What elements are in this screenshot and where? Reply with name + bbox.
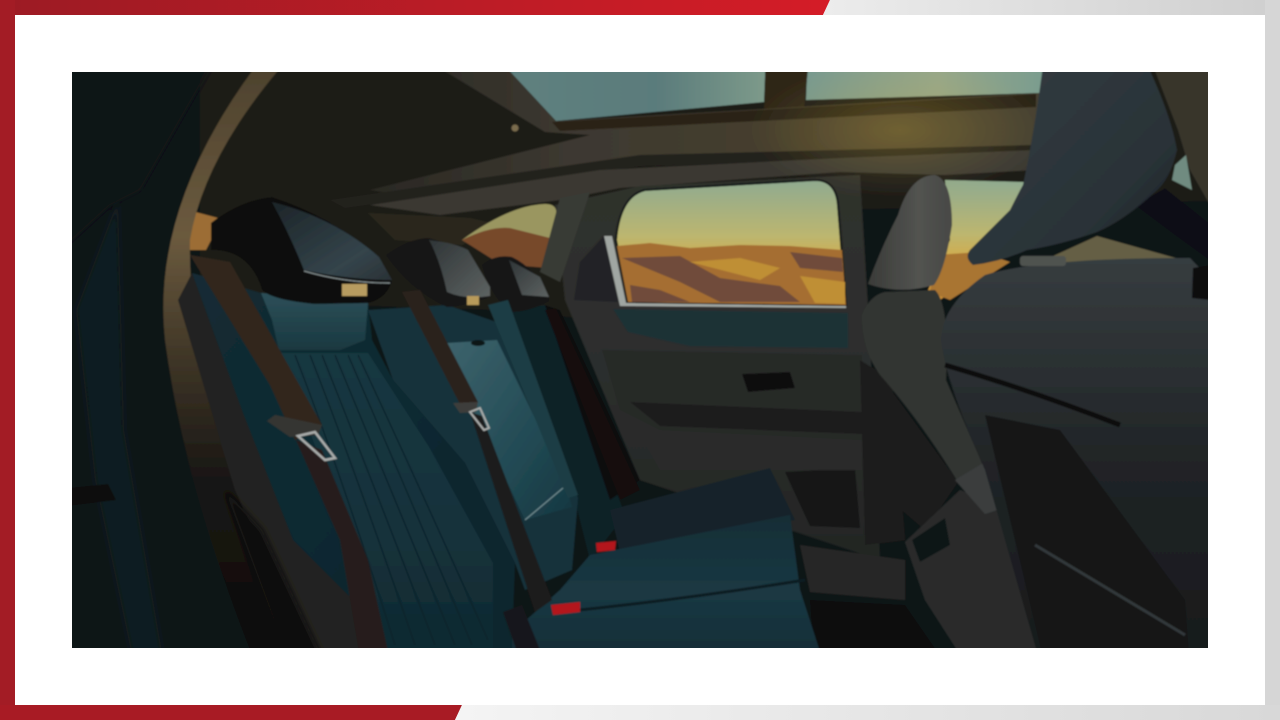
roof shadow seam — [552, 94, 1036, 131]
frame: bottom red band — [0, 705, 462, 720]
roof lamp — [512, 124, 518, 132]
outer seat back — [192, 273, 515, 670]
sunroof divider — [764, 72, 808, 109]
front seat pocket seam — [945, 365, 1120, 425]
seat side shadow — [225, 490, 328, 670]
seat belt middle — [402, 290, 552, 612]
third rear seat — [482, 256, 640, 560]
chrome window sill — [604, 236, 846, 308]
door window dark ridges — [622, 252, 843, 302]
far window — [1054, 234, 1176, 263]
middle belt lower strap — [470, 412, 552, 612]
seat buckle base — [503, 605, 540, 660]
third headrest — [482, 256, 549, 312]
third seat back — [510, 305, 625, 560]
front seat back — [941, 258, 1230, 670]
door handle — [742, 372, 795, 392]
frame: right grey band — [1265, 0, 1280, 720]
belt latch — [298, 432, 335, 460]
front cushion — [470, 515, 826, 670]
left quarter window — [189, 211, 219, 252]
console handle — [955, 462, 1003, 514]
rear shelf shadow — [370, 213, 486, 245]
right window sky — [928, 180, 1024, 300]
door armrest strip — [613, 309, 848, 348]
door lower panel — [743, 372, 794, 391]
door speaker — [785, 468, 860, 528]
door shut line pillar — [860, 360, 905, 545]
sun glow — [774, 84, 1020, 189]
middle panel clip — [471, 340, 485, 346]
rear side window — [462, 204, 556, 268]
console body — [905, 490, 1046, 670]
belt guide — [267, 415, 322, 437]
passenger seat back — [862, 290, 985, 482]
seat console — [905, 462, 1046, 670]
right passenger window — [928, 180, 1190, 300]
cushion seam — [560, 580, 805, 612]
door window — [616, 180, 846, 305]
middle panel seam — [525, 488, 563, 520]
seat side bolster trim — [178, 273, 382, 670]
middle belt upper strap — [402, 290, 478, 410]
headrest posts — [1020, 256, 1066, 266]
frame: bottom grey band — [455, 705, 1280, 720]
lumbar pad — [261, 293, 368, 350]
middle headrest face — [429, 240, 490, 297]
floor — [800, 545, 905, 600]
door panel — [555, 175, 880, 560]
headrest stitching — [304, 271, 390, 283]
front seat — [941, 50, 1230, 670]
roof beam — [372, 72, 1040, 192]
headliner — [199, 72, 1207, 318]
middle seat back — [368, 305, 578, 590]
sunroof glass front — [509, 72, 766, 122]
cushion — [470, 468, 826, 670]
front seat lower pocket — [985, 415, 1190, 670]
centre stripe lines — [295, 355, 488, 645]
third seat belt — [545, 308, 640, 500]
seat buckle red front — [551, 602, 580, 615]
roof lower seam — [390, 144, 1031, 194]
front pocket highlight — [1035, 545, 1185, 635]
right window mountains — [930, 252, 1010, 300]
middle seat upholstered panel — [447, 340, 572, 520]
door window sky — [616, 180, 846, 305]
seat belt outer — [190, 255, 392, 670]
passenger seat lower — [880, 375, 958, 530]
roof lower band — [370, 150, 1035, 215]
rear cushion — [610, 468, 795, 552]
middle rear seat — [368, 238, 578, 590]
frame: top red band — [0, 0, 830, 15]
door ledge — [50, 484, 116, 508]
right dark pillar — [1135, 188, 1230, 275]
rear window mountains — [462, 228, 550, 268]
outer headrest tag — [342, 284, 367, 296]
middle headrest — [386, 238, 490, 307]
middle headrest tag — [467, 296, 479, 305]
upper left panel — [50, 50, 220, 260]
third headrest face — [509, 260, 549, 297]
mid-front passenger seat — [862, 175, 985, 530]
middle belt guide — [453, 402, 478, 413]
door window mountains — [617, 243, 846, 305]
frame: top grey band — [823, 0, 1280, 15]
seat buckle red rear — [596, 541, 616, 552]
passenger headrest — [868, 175, 952, 290]
rear pillar trim — [540, 192, 590, 282]
door quarter panel — [574, 236, 618, 302]
far left door — [50, 50, 220, 670]
middle belt latch — [470, 408, 489, 430]
third seat side shadow — [545, 305, 640, 500]
right window glimpse — [1172, 155, 1192, 190]
sunroof glass rear — [804, 72, 1044, 102]
belt upper strap — [190, 255, 322, 440]
frame: left red band — [0, 0, 15, 720]
photo: car rear-seat interior — [72, 72, 1208, 648]
front seat headrest — [968, 50, 1177, 265]
middle side rib — [488, 300, 578, 498]
right roof pillar — [1147, 50, 1230, 240]
outer rear seat — [192, 197, 515, 670]
outer headrest face — [272, 202, 392, 280]
door window sunlit ridges — [690, 258, 845, 304]
outer headrest base — [211, 197, 392, 304]
right clip — [1192, 262, 1230, 302]
b-pillar curve — [163, 50, 308, 670]
teal trim panel — [76, 200, 165, 670]
floor shadow — [810, 600, 934, 648]
door pocket — [630, 402, 862, 434]
belt lower strap — [296, 440, 392, 670]
console controls — [912, 518, 950, 562]
outer seat centre stripes — [279, 353, 493, 670]
rear window sky — [462, 202, 558, 240]
door bottom panel — [823, 468, 855, 470]
